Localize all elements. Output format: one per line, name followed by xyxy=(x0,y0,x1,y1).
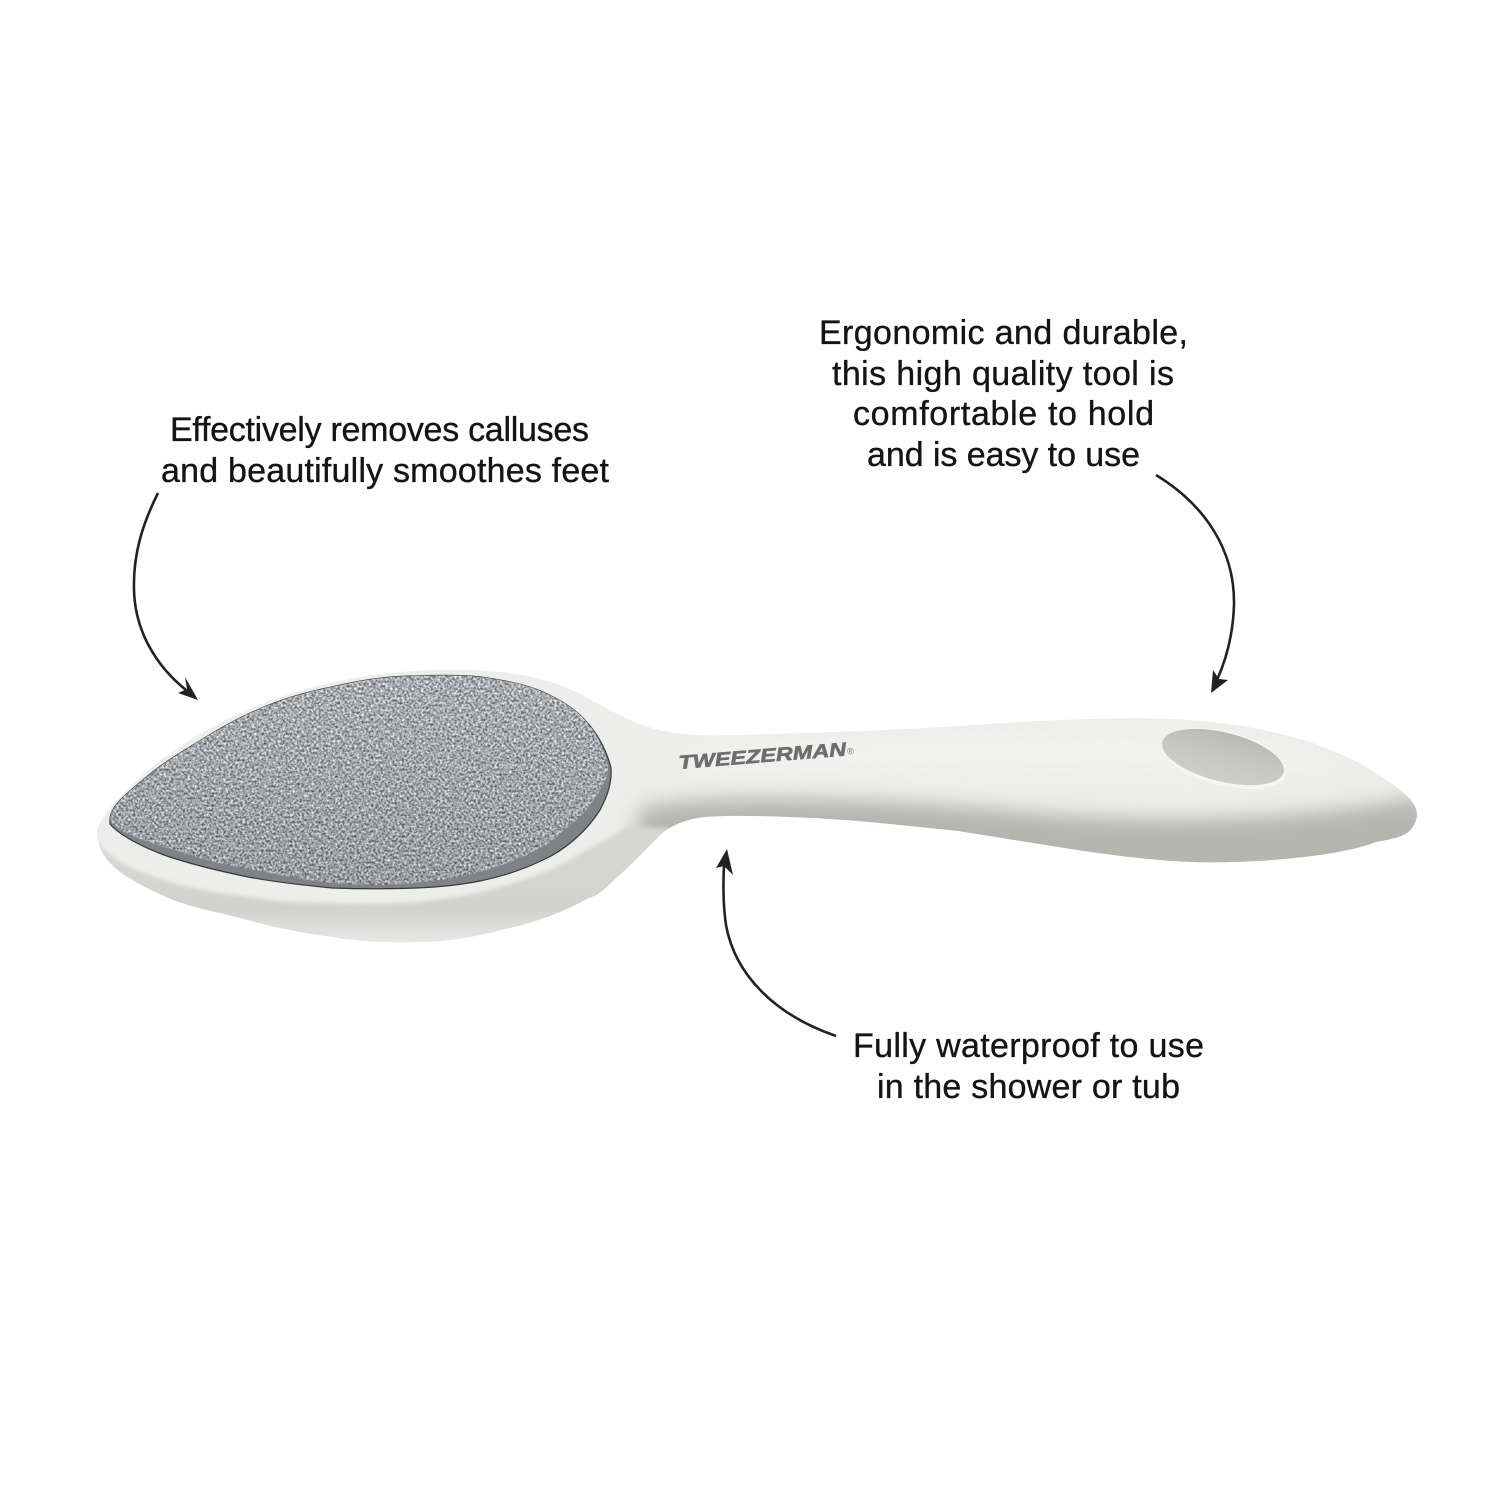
callout: removes calluses xyxy=(161,411,610,490)
brand logo: ® xyxy=(847,746,855,756)
callout: waterproof xyxy=(853,1027,1204,1106)
arrow: to handle xyxy=(1156,475,1234,693)
grip hole xyxy=(1155,717,1293,800)
pad abrasive surface xyxy=(110,675,608,885)
callout: waterproof: Fully waterproof to use xyxy=(853,1027,1204,1065)
brand logo: TWEEZERMAN xyxy=(678,739,848,774)
callout: ergonomic and durable: Ergonomic and durable, xyxy=(819,314,1188,352)
scoop underside xyxy=(99,826,669,942)
callout: ergonomic and durable xyxy=(819,314,1188,474)
callout: ergonomic and durable: and is easy to use xyxy=(867,436,1140,474)
product: foot file xyxy=(90,665,1430,960)
handle shading xyxy=(90,730,1430,960)
callout: removes calluses: and beautifully smoothes feet xyxy=(161,452,610,490)
handle body xyxy=(97,670,1417,942)
callout: removes calluses: Effectively removes calluses xyxy=(170,411,589,449)
arrow: to pad xyxy=(134,493,198,700)
callout: ergonomic and durable: this high quality tool is xyxy=(832,355,1174,393)
arrow: to body xyxy=(716,849,836,1036)
callout: ergonomic and durable: comfortable to hold xyxy=(853,395,1154,433)
pad base xyxy=(110,675,611,889)
callout: waterproof: in the shower or tub xyxy=(877,1068,1180,1106)
